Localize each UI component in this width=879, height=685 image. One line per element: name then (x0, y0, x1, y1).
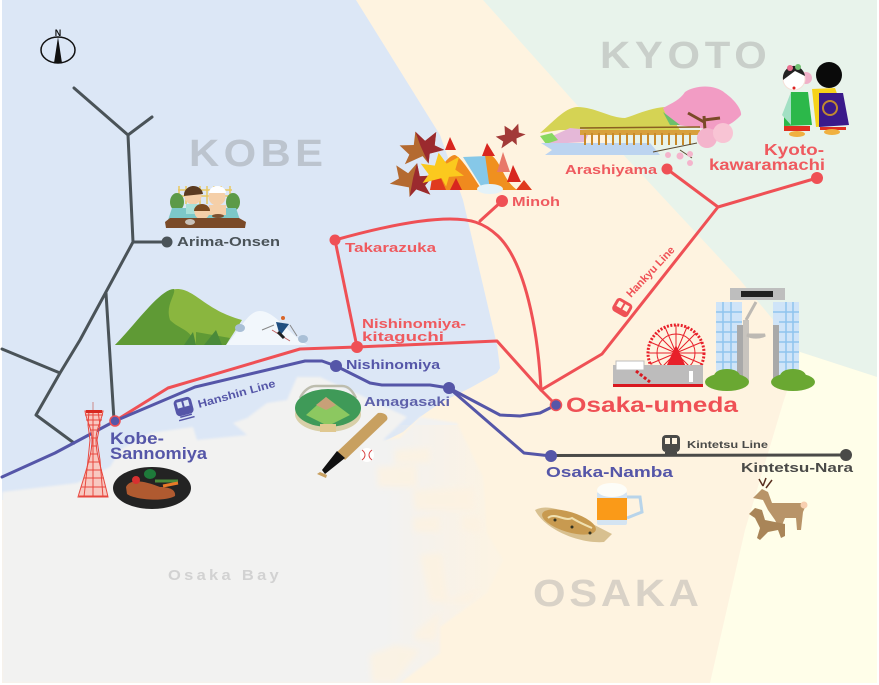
region label: KOBE: KOBE (189, 133, 327, 175)
station label: Takarazuka: Takarazuka (345, 240, 437, 255)
label: Osaka Bay: Osaka Bay (168, 568, 282, 584)
station label: Osaka-Namba: Osaka-Namba (546, 464, 674, 481)
station label: Kobe-Sannomiya (110, 429, 208, 463)
icon: Hanshin train (173, 396, 196, 421)
station: Takarazuka (330, 234, 340, 246)
station label: Minoh: Minoh (512, 194, 560, 209)
illustration: Kobe beef plate (113, 467, 191, 509)
illustration: baseball bat and ball (317, 413, 387, 478)
grey JR and local lines (2, 88, 167, 443)
illustration: Umeda Sky Building (716, 288, 799, 382)
illustration: beer mug (597, 483, 642, 525)
illustration: bushes (705, 369, 815, 391)
station label: Kyoto-kawaramachi (709, 142, 825, 174)
station: Kyoto-kawaramachi (811, 172, 823, 184)
region: Kobe (2, 0, 500, 500)
illustration: onsen bathers (165, 186, 246, 228)
station label: Amagasaki: Amagasaki (364, 394, 450, 409)
station label: Nishinomiya: Nishinomiya (346, 357, 441, 372)
station label: Arashiyama: Arashiyama (565, 162, 658, 177)
station label: Kobe-Sannomiya: Kobe- (110, 429, 164, 448)
station: Amagasaki (443, 382, 455, 394)
station label: Nishinomiya-kitaguchi: kitaguchi (362, 329, 444, 344)
icon: Hankyu train (611, 297, 634, 319)
illustration: Arashiyama hills and Togetsukyo bridge (540, 86, 741, 166)
station label: Arima-Onsen: Arima-Onsen (177, 234, 280, 249)
station label: Osaka-umeda: Osaka-umeda (566, 394, 738, 417)
illustration: snowy slope and skier (226, 311, 308, 345)
station: Osaka-Namba (545, 450, 557, 462)
line: Kintetsu (551, 454, 846, 457)
compass: north arrow (41, 28, 75, 63)
line label: Hankyu Line: Hankyu Line (624, 244, 678, 300)
region label: KYOTO: KYOTO (600, 35, 772, 77)
region: Nara (710, 352, 877, 683)
station label: Nishinomiya-kitaguchi (362, 316, 466, 344)
station: Nishinomiya-kitaguchi (351, 341, 363, 353)
illustration: Kobe Port Tower (78, 402, 108, 497)
station: Minoh (496, 195, 508, 207)
illustration: autumn leaves and Minoh waterfall (388, 119, 532, 202)
region: Osaka Bay (2, 377, 503, 683)
compass: north arrow: N (55, 28, 61, 38)
station: Arashiyama (662, 164, 672, 174)
station label: Kyoto-kawaramachi: kawaramachi (709, 157, 825, 174)
illustration: takoyaki boat (535, 504, 612, 542)
illustration: Koshien stadium (295, 386, 361, 432)
station: Nishinomiya (330, 360, 342, 372)
station label: Kyoto-kawaramachi: Kyoto- (764, 142, 824, 159)
station: Kintetsu-Nara (840, 449, 852, 461)
region label: OSAKA: OSAKA (533, 573, 703, 615)
station: Kobe-Sannomiya (110, 416, 120, 426)
line label: Hanshin Line: Hanshin Line (197, 378, 277, 411)
shoreline fade (447, 425, 502, 618)
illustration: Nara deer (749, 478, 808, 540)
line label: Kintetsu Line: Kintetsu Line (687, 439, 768, 451)
illustration: Ferris wheel and HEP building (613, 325, 704, 387)
line: Hanshin (purple) (2, 361, 556, 477)
station label: Kobe-Sannomiya: Sannomiya (110, 444, 208, 463)
stations (110, 164, 852, 462)
region: Kyoto (483, 0, 877, 377)
line: Hankyu (red) (115, 169, 817, 421)
station label: Nishinomiya-kitaguchi: Nishinomiya- (362, 316, 466, 331)
station: Arima-Onsen (162, 236, 172, 248)
illustration: maiko pair (782, 62, 849, 137)
land patches along the bay (372, 451, 439, 682)
illustration: green mountain (115, 289, 242, 345)
station label: Kintetsu-Nara: Kintetsu-Nara (741, 460, 854, 475)
station: Osaka-umeda (550, 400, 562, 410)
icon: Kintetsu train (662, 435, 680, 453)
